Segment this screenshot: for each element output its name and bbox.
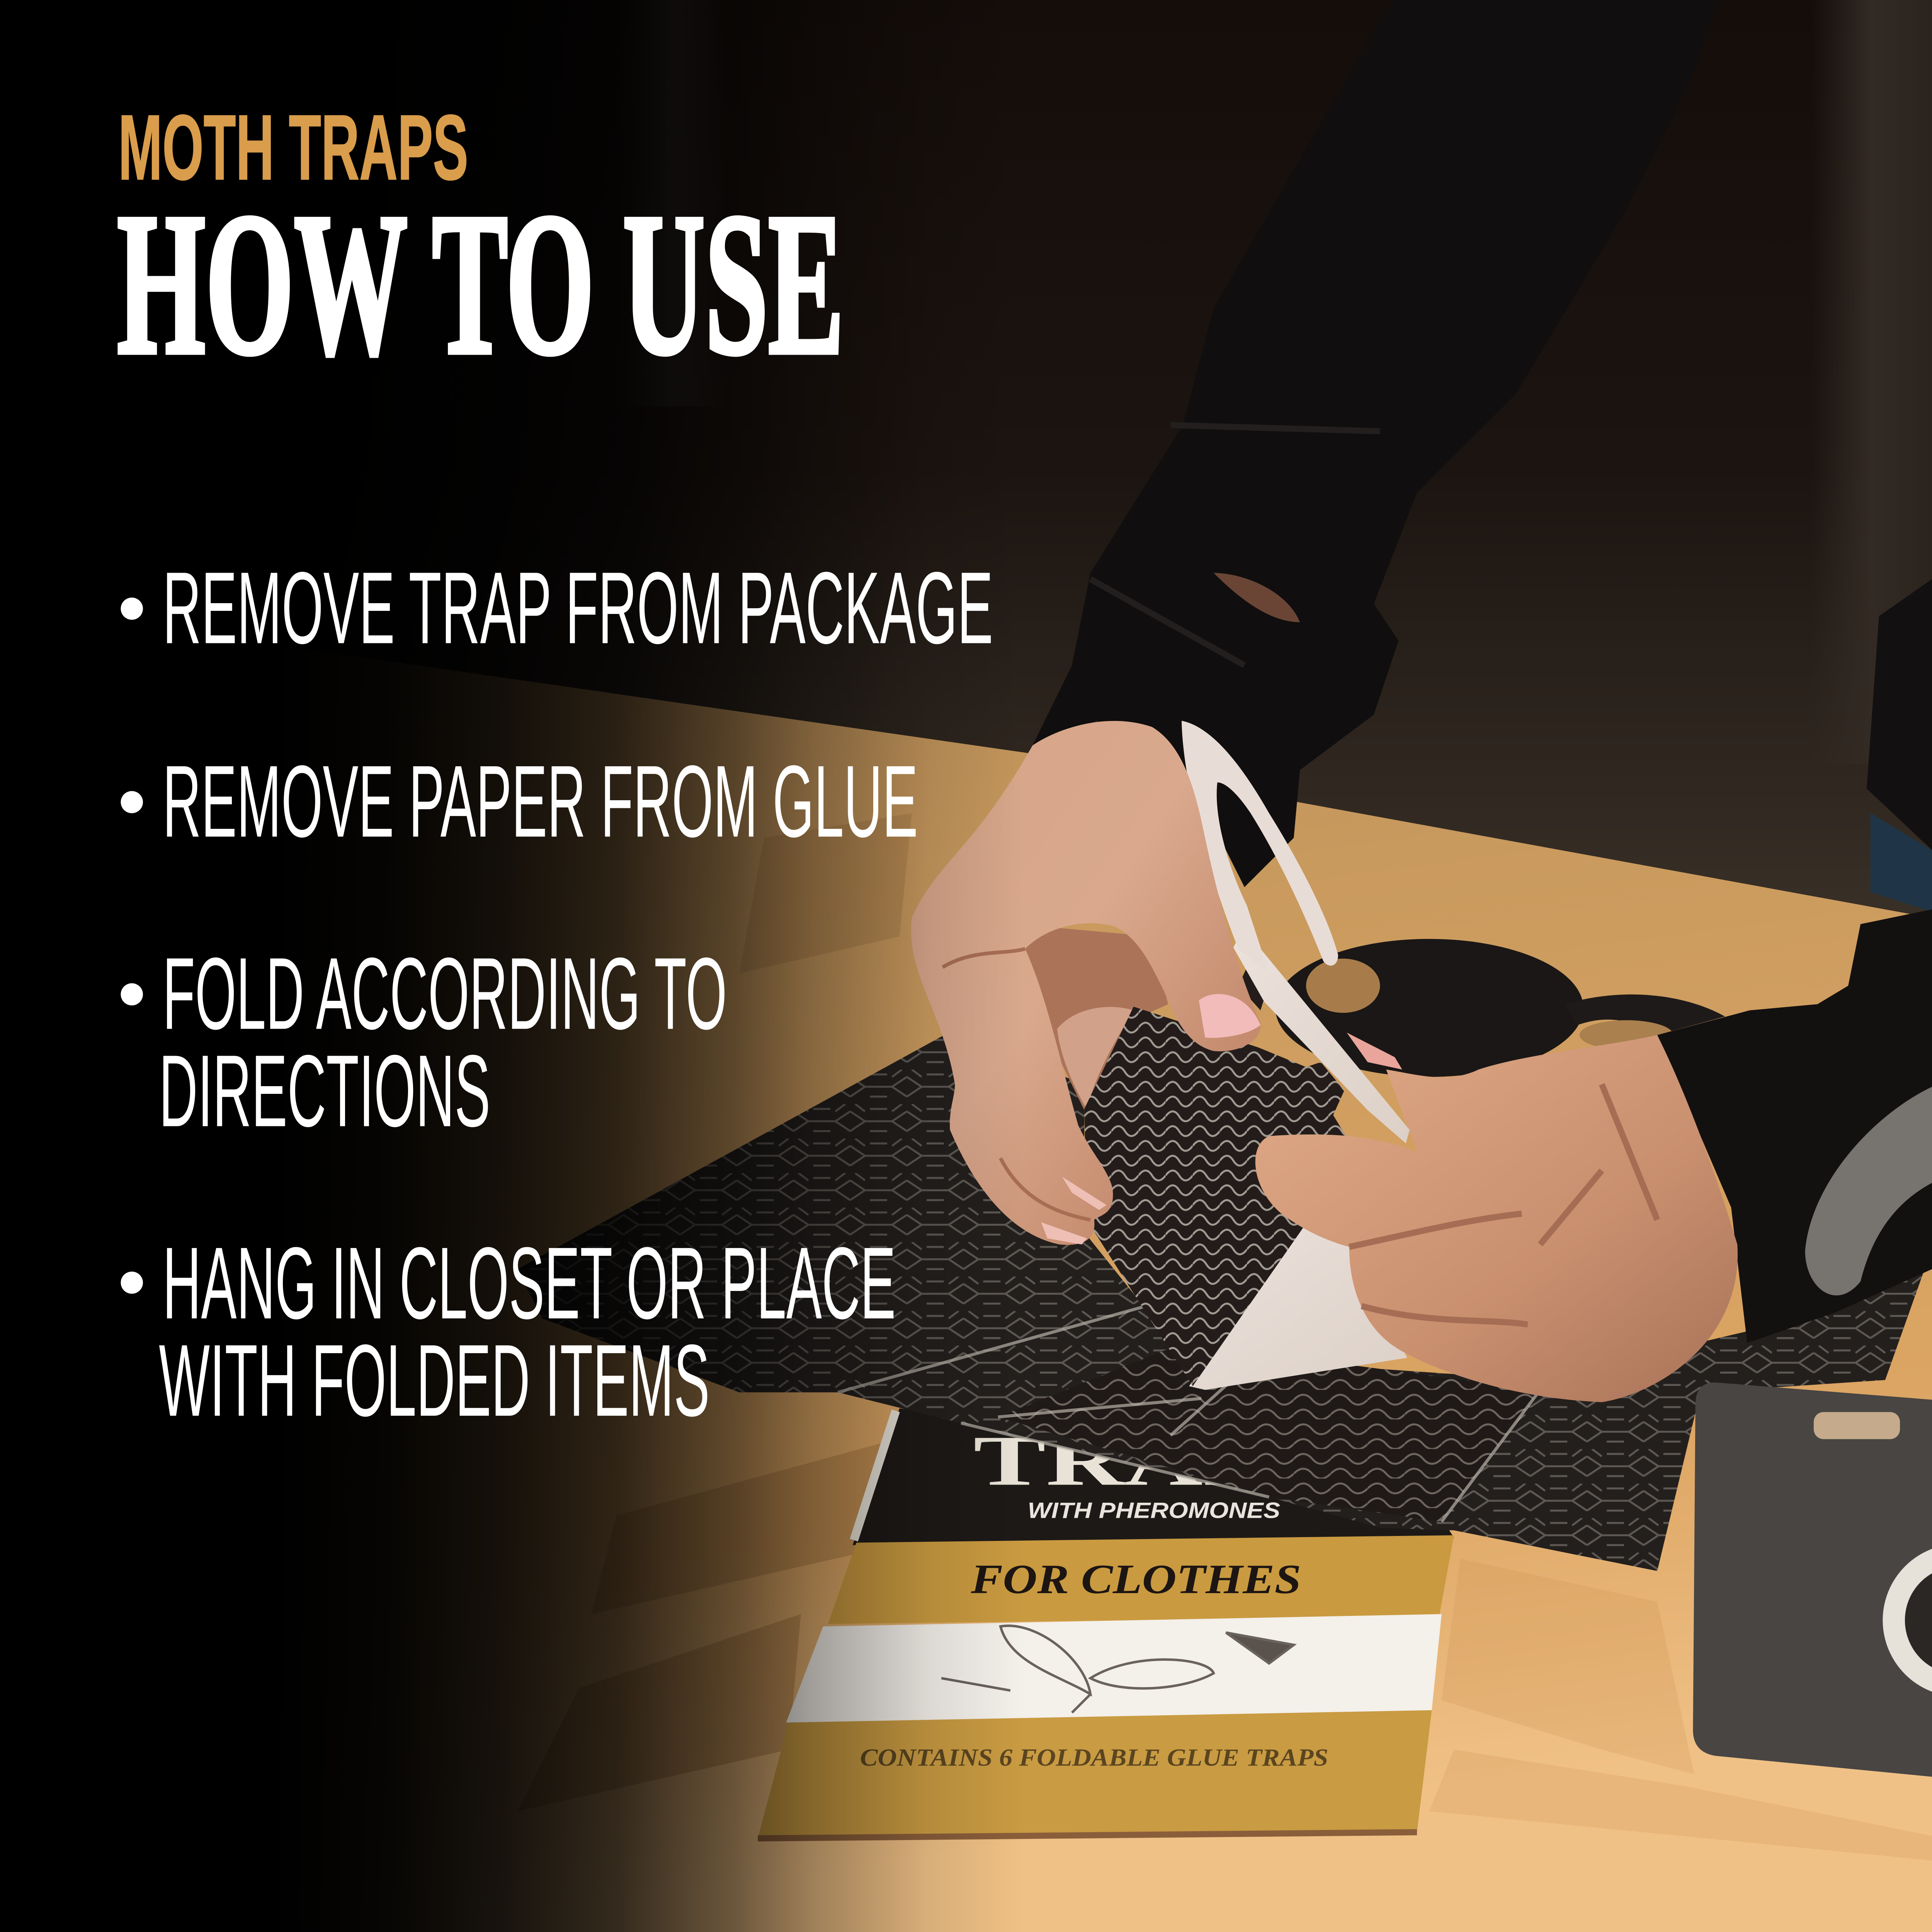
small tab by thumb: [1238, 967, 1268, 1010]
package bottom edge: [758, 1832, 1417, 1838]
step 3: [121, 937, 727, 1148]
package subheading: WITH PHEROMONES: [1027, 1498, 1280, 1523]
wave patterned trap panel: [1084, 1007, 1354, 1386]
left hand: [911, 721, 1261, 1245]
left hand finger creases: [942, 949, 1090, 1220]
right hand knuckle shading: [1349, 1084, 1657, 1325]
foreground grey hanger hook: [1805, 1087, 1932, 1295]
step 3: DIRECTIONS: [159, 1034, 490, 1148]
right thumb nail: [1347, 1032, 1402, 1070]
package label: FOR CLOTHES: [971, 1556, 1301, 1602]
package lower gold band: [758, 1710, 1432, 1838]
package top gold band: [828, 1535, 1454, 1624]
torso at right edge: [1867, 579, 1932, 850]
patterned trap sheet: [517, 1032, 1925, 1571]
left hand back fingers: [1017, 924, 1168, 1115]
step 4: [121, 1226, 896, 1438]
step 1: [121, 551, 993, 665]
step 3: FOLD ACCORDING TO: [163, 937, 727, 1051]
package black header: [853, 1408, 1454, 1545]
package lower text: CONTAINS 6 FOLDABLE GLUE TRAPS: [860, 1744, 1328, 1771]
product package: [758, 1408, 1454, 1838]
blue jeans at right edge: [1871, 813, 1932, 912]
sleeve cuff folds: [1090, 425, 1380, 665]
cream hanger tab: [1182, 721, 1410, 1143]
package trap lettering: TRAP: [973, 1421, 1269, 1500]
wooden table: [0, 641, 1932, 1932]
card hanging slot: [1814, 1412, 1900, 1439]
step 4: WITH FOLDED ITEMS: [159, 1323, 710, 1438]
wrist skin showing through sleeve: [1214, 573, 1300, 622]
step 1: REMOVE TRAP FROM PACKAGE: [163, 551, 993, 665]
cream base of folded trap: [1189, 1220, 1407, 1390]
wall lighter vertical bands: [616, 0, 1932, 764]
step 2: REMOVE PAPER FROM GLUE: [163, 744, 918, 859]
dark hanger shapes behind hands: [1275, 939, 1725, 1077]
wall background: [0, 0, 1932, 936]
package white band: [786, 1614, 1442, 1723]
title: how to use: HOW TO USE: [117, 171, 844, 396]
right hand: [1255, 1032, 1738, 1402]
left finger nails: [1041, 1177, 1107, 1245]
right arm sleeve: [1657, 909, 1932, 1343]
panel edges: [838, 1306, 1540, 1522]
package white margin: [854, 1411, 896, 1540]
finished trap card lower right: [1693, 1383, 1932, 1777]
card seal: [1883, 1544, 1932, 1697]
moth illustration: [941, 1626, 1294, 1713]
left arm sleeve: [1032, 0, 1719, 887]
eyebrow: moth traps: MOTH TRAPS: [118, 96, 468, 199]
step 2: [121, 744, 918, 859]
left thumb nail: [1199, 994, 1260, 1038]
scale patterned panels: [998, 1343, 1540, 1522]
step 4: HANG IN CLOSET OR PLACE: [163, 1226, 896, 1340]
instruction list: [121, 551, 993, 1438]
